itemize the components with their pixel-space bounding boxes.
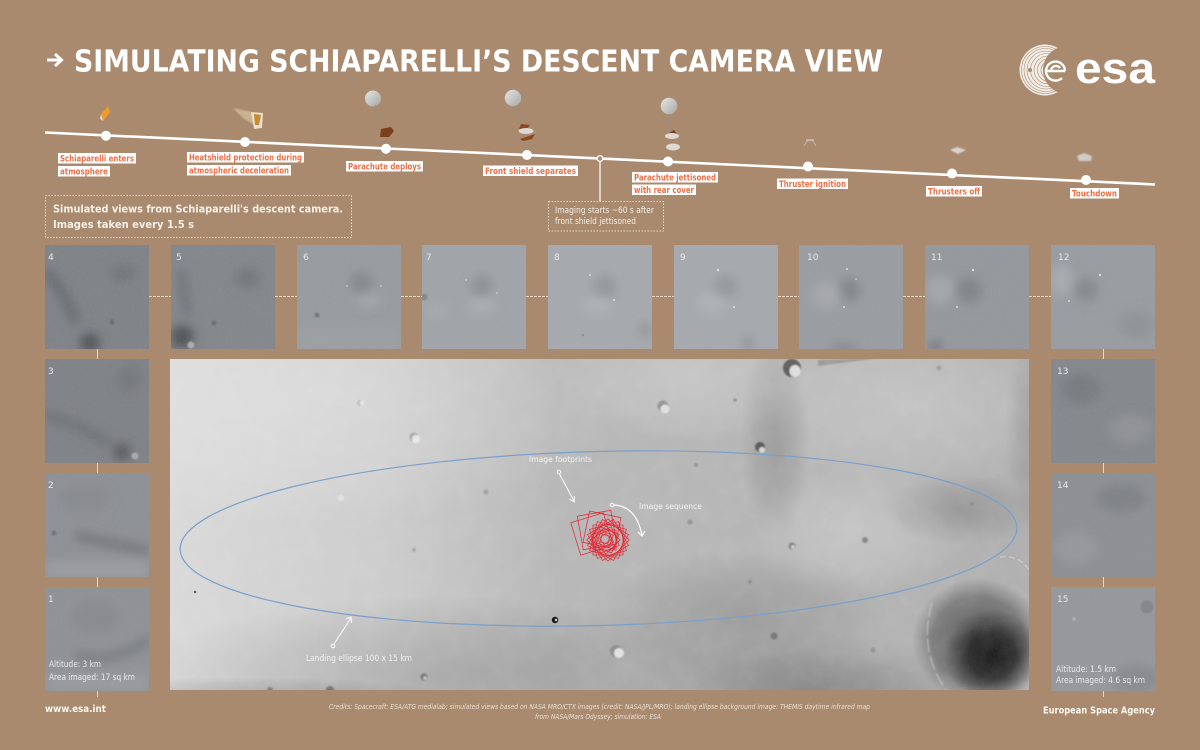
label: Parachute deploys: Parachute deploys xyxy=(348,162,421,172)
image 4: 4 xyxy=(48,253,54,263)
image 12 xyxy=(1051,245,1155,349)
footer: credits: Credits: Spacecraft: ESA/ATG medialab; simulated views based on NASA MRO/CTX images (credit: NASA/JPL/MRO); landing ellipse background image: THEMIS daytime infrared map xyxy=(329,703,870,711)
icon: thrusters off xyxy=(950,147,966,154)
image 4 xyxy=(45,245,149,349)
landing ellipse xyxy=(178,441,1019,636)
image 8: 8 xyxy=(554,253,560,263)
image 13 xyxy=(1051,359,1155,463)
image 10 xyxy=(799,245,903,349)
image 1 xyxy=(45,587,149,691)
label: Thruster ignition: Thruster ignition xyxy=(779,180,846,190)
image 9 xyxy=(674,245,778,349)
image 1: Altitude: 3 km xyxy=(49,659,101,669)
icon: parachute deploys xyxy=(365,90,394,137)
image 7: 7 xyxy=(426,253,432,263)
icon: parachute jettisoned xyxy=(661,98,680,150)
label: Heatshield protection: atmospheric deceleration xyxy=(189,166,289,176)
icon: Schiaparelli entering atmosphere xyxy=(100,106,110,121)
icon: touchdown xyxy=(1077,153,1092,161)
footer: credits: from NASA/Mars Odyssey; simulation: ESA xyxy=(535,713,661,721)
footer: website: www.esa.int xyxy=(45,704,106,715)
timeline xyxy=(45,131,1155,201)
label: Schiaparelli enters atmosphere xyxy=(58,153,136,177)
image 7 xyxy=(422,245,526,349)
image 5: 5 xyxy=(176,253,182,263)
image footprints xyxy=(571,510,629,561)
title: SIMULATING SCHIAPARELLI’S DESCENT CAMERA VIEW xyxy=(74,44,883,80)
label: Parachute jettisoned xyxy=(632,172,718,196)
image 6: 6 xyxy=(303,253,309,263)
annotation: image sequence xyxy=(610,501,702,536)
image 13: 13 xyxy=(1057,367,1068,377)
callout: imaging starts: Imaging starts ~60 s after xyxy=(555,206,654,216)
label: Parachute jettisoned: Parachute jettisoned xyxy=(634,173,716,183)
footer: credits xyxy=(329,703,870,721)
label: Schiaparelli enters atmosphere: atmosphere xyxy=(60,167,108,177)
icon: title arrow xyxy=(47,54,62,66)
footer: agency: European Space Agency xyxy=(1043,706,1155,716)
label: Front shield separates: Front shield separates xyxy=(485,167,576,177)
crater: large dark crater xyxy=(916,556,1029,690)
image 15: Area imaged: 4.6 sq km xyxy=(1056,675,1145,685)
callout: imaging starts xyxy=(548,202,664,231)
callout: simulated views: Images taken every 1.5 s xyxy=(53,218,194,231)
annotation: image sequence: Image sequence xyxy=(639,501,702,511)
image 11: 11 xyxy=(931,253,942,263)
image 15: 15 xyxy=(1057,595,1068,605)
label: Heatshield protection xyxy=(187,152,304,176)
image 15: Altitude: 1.5 km xyxy=(1056,664,1116,674)
image 8 xyxy=(548,245,652,349)
image 15 xyxy=(1051,587,1155,691)
image 1: 1 xyxy=(48,595,54,605)
image 3 xyxy=(45,359,149,463)
label: Parachute jettisoned: with rear cover xyxy=(634,186,695,196)
image 5 xyxy=(171,245,275,349)
image 3: 3 xyxy=(48,367,54,377)
label: Thrusters off: Thrusters off xyxy=(928,187,981,197)
callout: imaging starts: front shield jettisoned xyxy=(555,217,636,227)
image 12: 12 xyxy=(1058,253,1069,263)
image 10: 10 xyxy=(807,253,819,263)
connector lines xyxy=(98,296,1104,697)
annotation: landing ellipse xyxy=(306,617,412,664)
annotation: landing ellipse: Landing ellipse 100 x 15 km xyxy=(306,654,412,664)
image 6 xyxy=(297,245,401,349)
callout: simulated views xyxy=(46,196,352,238)
image 14: 14 xyxy=(1057,481,1069,491)
image 1: Area imaged: 17 sq km xyxy=(49,672,135,682)
callout: simulated views: Simulated views from Schiaparelli's descent camera. xyxy=(53,202,343,216)
map: landing ellipse background xyxy=(170,359,1029,690)
small craters xyxy=(267,358,974,694)
icon: front shield separates xyxy=(505,90,535,141)
label: Heatshield protection: Heatshield protection during xyxy=(189,153,302,163)
icon: thruster ignition xyxy=(804,140,816,146)
image 11 xyxy=(925,245,1029,349)
annotation: image footprints xyxy=(529,454,592,502)
icon: heatshield xyxy=(233,108,263,129)
image 9: 9 xyxy=(680,253,686,263)
image 2: 2 xyxy=(48,481,54,491)
image 14 xyxy=(1051,473,1155,577)
image 2 xyxy=(45,473,149,577)
label: Schiaparelli enters atmosphere: Schiaparelli enters xyxy=(60,154,134,164)
annotation: image footprints: Image footprints xyxy=(529,454,592,464)
logo: ESA: esa xyxy=(1075,44,1156,93)
label: Touchdown: Touchdown xyxy=(1072,189,1117,199)
logo: ESA xyxy=(1020,44,1156,96)
